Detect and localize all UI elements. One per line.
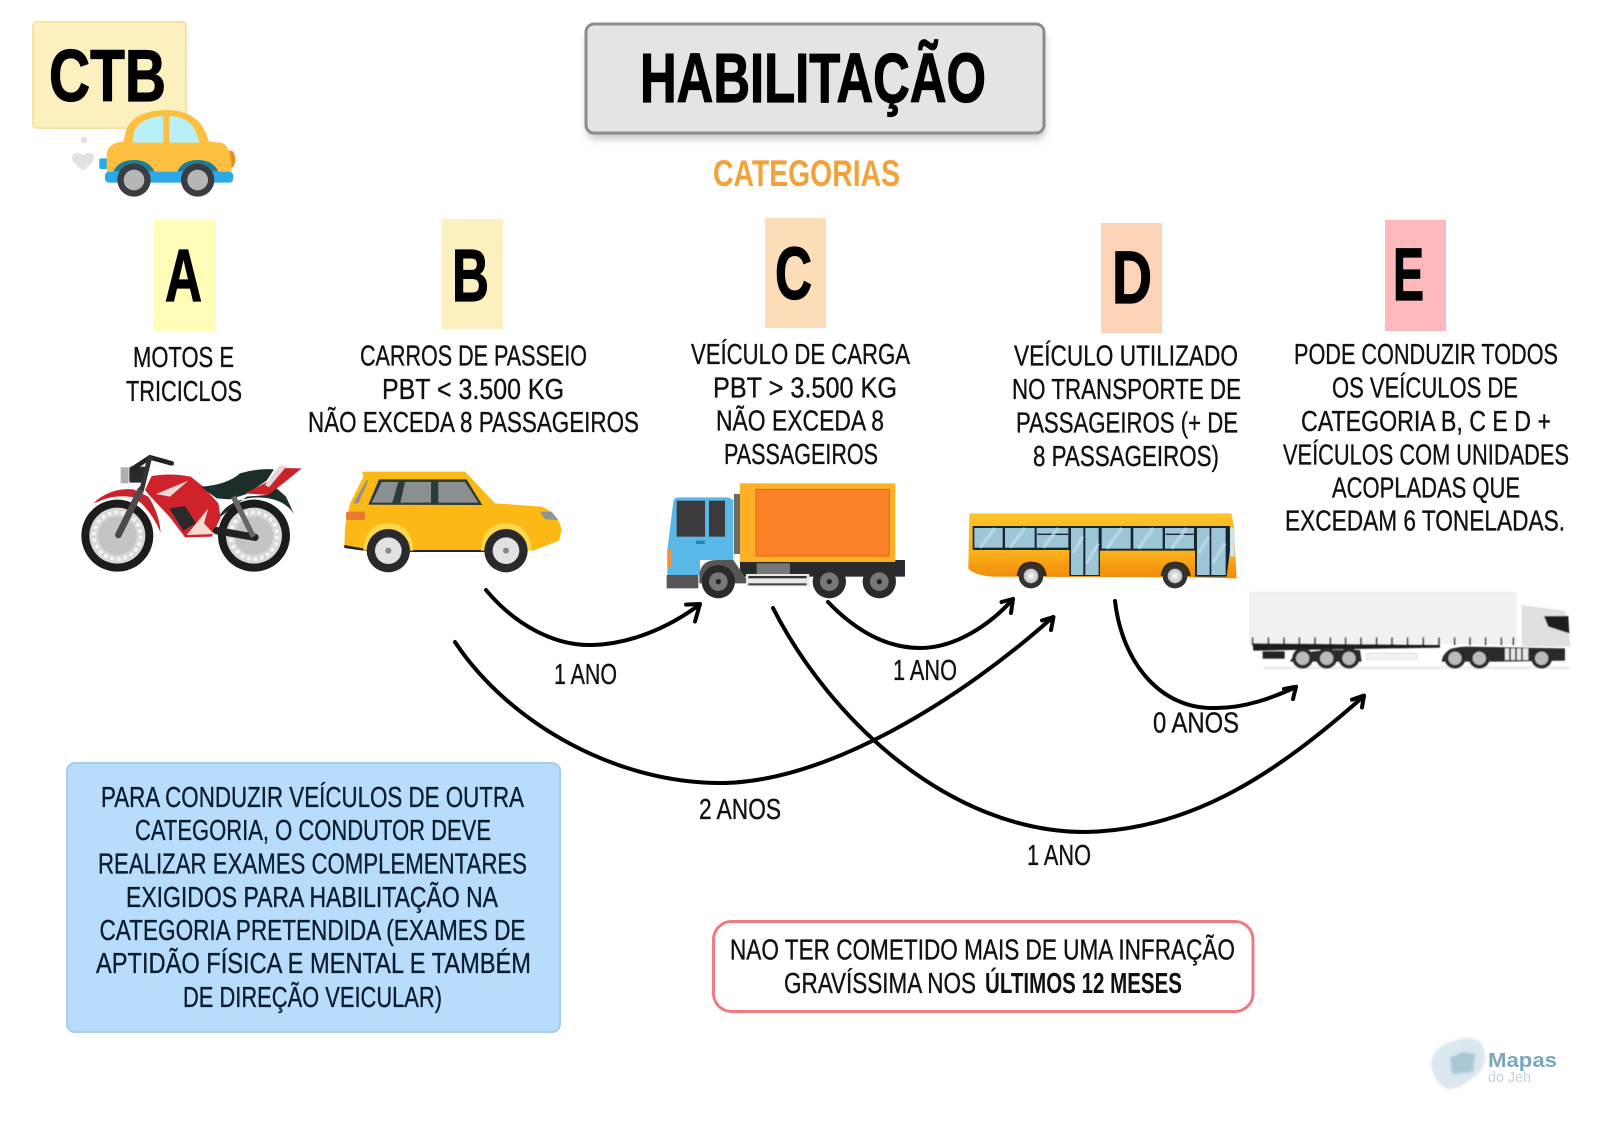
label: 1 ano C to D: 1 ANO xyxy=(893,655,957,687)
panel: exames complementares: APTIDÃO FÍSICA E MENTAL E TAMBÉM xyxy=(96,946,531,980)
label: 2 anos: 2 ANOS xyxy=(699,794,781,826)
watermark: Mapas do Jeh: Mapas xyxy=(1488,1050,1557,1072)
description B: NÃO EXCEDA 8 PASSAGEIROS xyxy=(308,405,639,439)
icon: articulated lorry xyxy=(1250,593,1571,669)
panel: exames complementares: DE DIREÇÃO VEICULAR) xyxy=(183,980,442,1014)
description C: PASSAGEIROS xyxy=(724,439,878,471)
watermark: Mapas do Jeh: do Jeh xyxy=(1488,1069,1531,1086)
panel: exames complementares: EXIGIDOS PARA HABILITAÇÃO NA xyxy=(126,880,499,914)
description A: TRICICLOS xyxy=(126,376,242,408)
panel: exames complementares: CATEGORIA, O CONDUTOR DEVE xyxy=(135,815,491,847)
arrow: C to D xyxy=(828,599,1013,648)
description A: MOTOS E xyxy=(133,342,234,374)
description C: VEÍCULO DE CARGA xyxy=(691,338,911,371)
description D xyxy=(1012,340,1241,473)
description D: 8 PASSAGEIROS) xyxy=(1033,441,1219,473)
icon: motorcycle xyxy=(81,457,302,572)
icon: yellow SUV xyxy=(344,472,562,572)
panel: exames complementares: CATEGORIA PRETENDIDA (EXAMES DE xyxy=(100,915,526,947)
arrow: C to E xyxy=(773,608,1364,832)
category B: B xyxy=(452,234,489,317)
description E: OS VEÍCULOS DE xyxy=(1332,372,1518,404)
category C: C xyxy=(775,232,812,315)
panel: exames complementares: REALIZAR EXAMES COMPLEMENTARES xyxy=(98,848,527,880)
panel: exames complementares xyxy=(67,763,560,1032)
icon: bus xyxy=(968,513,1237,588)
title box xyxy=(586,24,1045,139)
icon: truck xyxy=(667,483,905,598)
panel: exames complementares: PARA CONDUZIR VEÍCULOS DE OUTRA xyxy=(101,781,525,814)
arrow: D to E xyxy=(1115,601,1296,708)
category A xyxy=(126,220,242,408)
panel: infração xyxy=(714,922,1253,1012)
description C: PBT > 3.500 KG xyxy=(713,372,897,404)
category C xyxy=(691,218,911,471)
panel: infração: GRAVÍSSIMA NOS xyxy=(784,967,976,1000)
description B xyxy=(308,340,639,439)
CTB badge: CTB xyxy=(49,36,166,117)
category E xyxy=(1283,220,1569,538)
icon: yellow car xyxy=(72,110,235,197)
label: 1 ano C to E: 1 ANO xyxy=(1027,840,1091,872)
CTB badge xyxy=(33,22,186,128)
subtitle: categorias: CATEGORIAS xyxy=(713,153,900,194)
label: 1 ano B to C: 1 ANO xyxy=(554,659,617,691)
panel: infração: ÚLTIMOS 12 MESES xyxy=(985,966,1182,1000)
description C: NÃO EXCEDA 8 xyxy=(716,404,884,438)
panel: infração: NAO TER COMETIDO MAIS DE UMA INFRAÇÃO xyxy=(730,932,1235,966)
description B: CARROS DE PASSEIO xyxy=(360,340,587,372)
label: 0 anos: 0 ANOS xyxy=(1153,708,1239,740)
title box: HABILITAÇÃO xyxy=(640,39,986,117)
description D: VEÍCULO UTILIZADO xyxy=(1014,340,1238,372)
description A xyxy=(126,342,242,408)
description E xyxy=(1283,339,1569,538)
arrow: B to D xyxy=(455,617,1054,783)
description D: PASSAGEIROS (+ DE xyxy=(1016,408,1238,440)
description C xyxy=(691,338,911,471)
category D xyxy=(1012,223,1241,473)
description E: ACOPLADAS QUE xyxy=(1332,472,1520,504)
category D: D xyxy=(1112,236,1152,319)
arrow: B to C xyxy=(486,590,700,645)
description D: NO TRANSPORTE DE xyxy=(1012,374,1241,406)
category A: A xyxy=(165,234,202,317)
category E: E xyxy=(1393,233,1424,316)
category B xyxy=(308,219,639,439)
watermark: Mapas do Jeh xyxy=(1431,1038,1557,1089)
description B: PBT < 3.500 KG xyxy=(382,374,564,406)
